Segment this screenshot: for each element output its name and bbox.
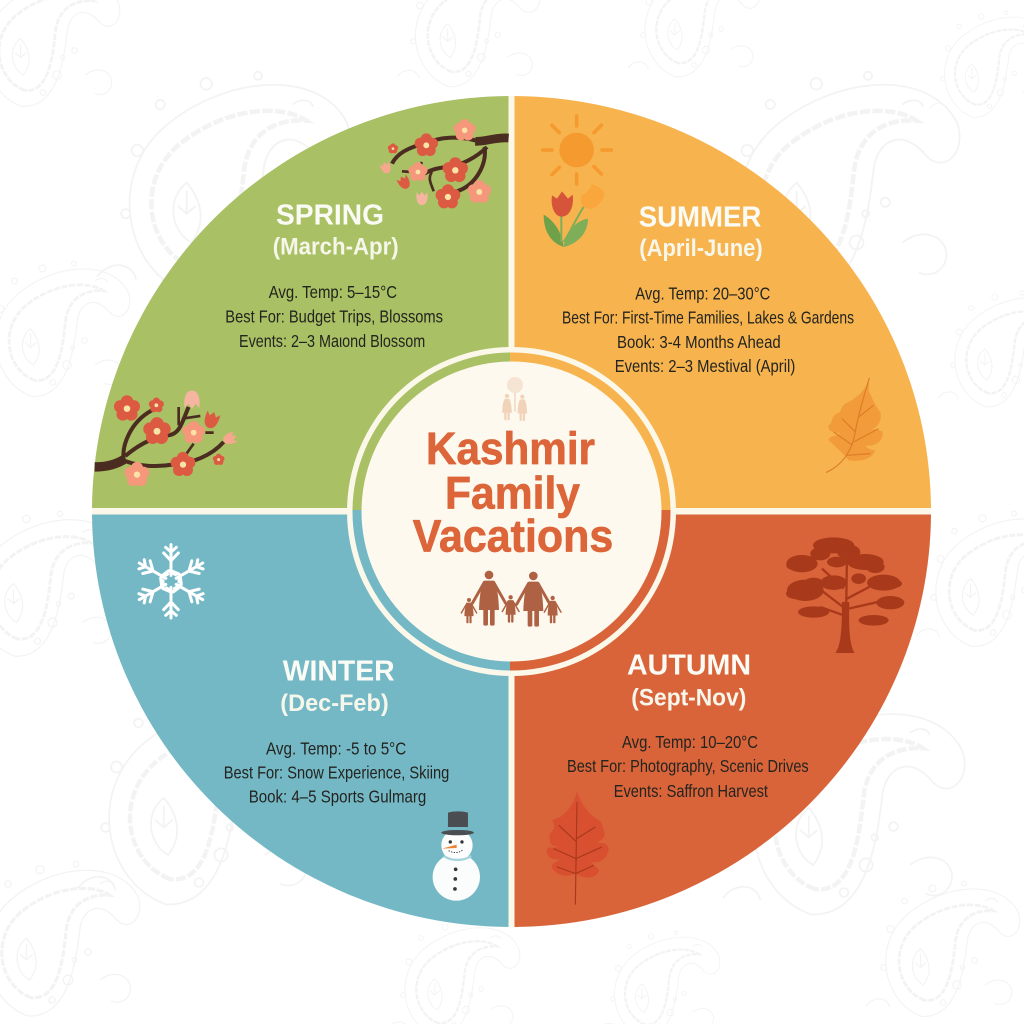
autumn quadrant [514, 514, 931, 927]
summer details [562, 283, 854, 376]
title: Family [445, 467, 580, 518]
autumn details: Avg. Temp: 10–20°C [622, 732, 758, 752]
hub ring: summer arc [510, 352, 670, 510]
winter details [224, 738, 449, 807]
icon: family holding hands [461, 571, 561, 627]
spring dates: (March-Apr) [273, 233, 399, 260]
icon: sun [543, 116, 611, 184]
winter dates: (Dec-Feb) [280, 690, 389, 717]
center hub [347, 347, 676, 676]
spring quadrant [92, 96, 508, 508]
icon: tree silhouette [786, 537, 904, 653]
autumn details: Best For: Photography, Scenic Drives [567, 756, 809, 776]
hub outer cream ring [347, 347, 676, 676]
title [413, 423, 613, 562]
winter details: Best For: Snow Experience, Skiing [224, 763, 449, 783]
icon: blossom branch top right [379, 119, 509, 208]
summer details: Best For: First-Time Families, Lakes & Gardens [562, 308, 854, 328]
hub ring: spring arc [352, 352, 510, 510]
icon: snowflake [135, 545, 207, 618]
icon: snowman [433, 811, 480, 901]
autumn details [567, 732, 809, 801]
icon: orange leaf [826, 378, 883, 473]
wheel divider cross [92, 96, 931, 927]
hub ring: autumn arc [510, 510, 671, 671]
summer details: Avg. Temp: 20–30°C [635, 283, 770, 303]
spring details [225, 282, 443, 351]
autumn dates: (Sept-Nov) [631, 684, 746, 711]
autumn heading: AUTUMN [627, 649, 751, 681]
icon: faded family with balloon [499, 377, 530, 421]
winter details: Avg. Temp: -5 to 5°C [266, 738, 406, 758]
icon: red leaf [547, 790, 609, 905]
spring details: Events: 2–3 Maιond Blossom [239, 331, 425, 351]
summer details: Book: 3-4 Months Ahead [617, 332, 781, 352]
summer heading: SUMMER [639, 202, 761, 234]
spring heading: SPRING [276, 200, 384, 232]
summer details: Events: 2–3 Mestival (April) [615, 356, 795, 376]
panel: spring [92, 96, 509, 508]
winter heading: WINTER [283, 655, 395, 687]
hub inner disc [362, 362, 662, 662]
summer dates: (April-June) [639, 235, 763, 262]
winter quadrant [92, 514, 508, 927]
winter details: Book: 4–5 Sports Gulmarg [249, 787, 426, 807]
icon: tulips [544, 184, 605, 247]
summer quadrant [514, 96, 931, 508]
panel: summer [514, 96, 931, 508]
hub ring: winter arc [352, 510, 510, 670]
icon: blossom branch bottom left [95, 391, 238, 486]
panel: autumn [514, 514, 931, 927]
autumn details: Events: Saffron Harvest [614, 781, 768, 801]
spring details: Best For: Budget Trips, Blossoms [225, 307, 443, 327]
title: Vacations [413, 511, 613, 562]
panel: winter [92, 514, 508, 927]
spring details: Avg. Temp: 5–15°C [269, 282, 397, 302]
title: Kashmir [426, 423, 595, 474]
